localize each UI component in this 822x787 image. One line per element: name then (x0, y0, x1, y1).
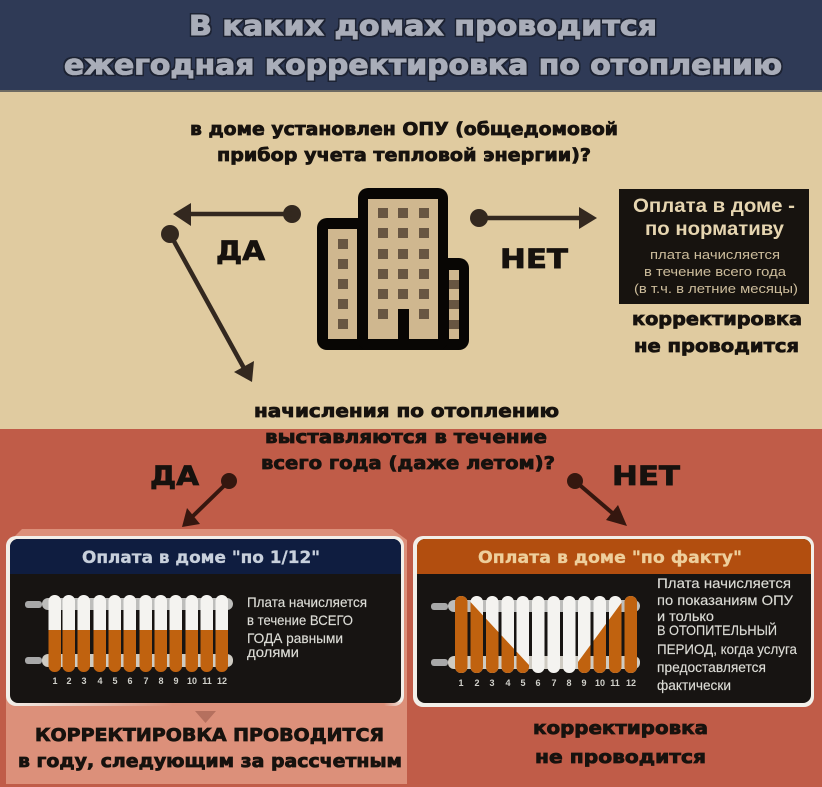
question: ОПУ: прибор учета тепловой энергии)? (217, 145, 591, 166)
beige background band (0, 91, 822, 431)
panel text: Плата начисляется (247, 594, 367, 610)
panel: норматив (619, 189, 809, 304)
note: корректировка не проводится (норматив): не проводится (634, 336, 799, 357)
panel text: В ОТОПИТЕЛЬНЫЙ (657, 621, 777, 638)
radiator: equal payments (25, 590, 235, 686)
month numbers: 8 (158, 676, 164, 686)
callout: корректировка проводится (6, 529, 407, 784)
month numbers: 10 (595, 678, 605, 688)
panel text: (в т.ч. в летние месяцы) (634, 281, 798, 296)
panel text: в течение ВСЕГО (247, 612, 353, 628)
question: начисления: выставляются в течение (265, 427, 547, 448)
month numbers: 1 (458, 678, 464, 688)
month numbers: 11 (202, 676, 212, 686)
panel header (417, 539, 811, 574)
panel: по 1/12 (6, 536, 404, 707)
month numbers: 2 (474, 678, 480, 688)
arrow: top right (470, 207, 597, 229)
month numbers: 5 (520, 678, 526, 688)
month numbers: 12 (217, 676, 227, 686)
callout: корректировка проводится: в году, следующим за рассчетным (18, 751, 402, 772)
callout: корректировка проводится: КОРРЕКТИРОВКА ПРОВОДИТСЯ (35, 725, 384, 746)
month numbers: 4 (97, 676, 103, 686)
red background band (0, 429, 822, 787)
arrow: down to second question (161, 225, 254, 382)
label: НЕТ: НЕТ (500, 244, 569, 275)
question: начисления (254, 401, 559, 474)
note: корректировка не проводится (по факту) (533, 718, 708, 768)
month numbers: 6 (535, 678, 541, 688)
label: НЕТ lower: НЕТ (612, 461, 681, 492)
icon: apartment buildings (317, 188, 469, 350)
panel text (657, 575, 797, 693)
arrow: lower right (567, 473, 627, 526)
panel text: долями (247, 644, 299, 660)
panel text: и только (657, 608, 714, 624)
panel text: ГОДА равными (247, 630, 343, 646)
month numbers: 6 (127, 676, 133, 686)
month numbers: 1 (52, 676, 58, 686)
note: корректировка не проводится (по факту): корректировка (533, 718, 708, 739)
question: начисления: всего года (даже летом)? (261, 453, 555, 474)
question: ОПУ (190, 119, 618, 166)
panel header (10, 539, 401, 574)
title: В каких домах проводится (189, 9, 657, 42)
month numbers: 5 (112, 676, 118, 686)
month numbers (52, 676, 227, 686)
header (0, 0, 822, 92)
panel heading: Оплата в доме "по 1/12" (82, 548, 320, 568)
panel text (634, 247, 798, 296)
note: корректировка не проводится (по факту): не проводится (535, 747, 706, 768)
month numbers: 8 (566, 678, 572, 688)
panel heading (633, 196, 795, 240)
panel text: ПЕРИОД, когда услуга (657, 641, 797, 657)
panel text: фактически (657, 677, 731, 693)
month numbers: 4 (505, 678, 511, 688)
month numbers (458, 678, 636, 688)
question: начисления: начисления по отоплению (254, 401, 559, 422)
month numbers: 10 (187, 676, 197, 686)
month numbers: 9 (581, 678, 587, 688)
month numbers: 12 (626, 678, 636, 688)
radiator: actual payments (431, 590, 642, 688)
panel text: предоставляется (657, 659, 766, 675)
title (64, 9, 782, 81)
arrow: top left (173, 203, 301, 226)
panel text: по показаниям ОПУ (657, 592, 793, 608)
panel heading: Оплата в доме - (633, 196, 795, 217)
panel text: Плата начисляется (657, 575, 791, 591)
panel heading: по нормативу (645, 219, 784, 240)
panel text: в течение всего года (644, 264, 787, 279)
pointer triangle (195, 711, 216, 723)
panel text: плата начисляется (650, 247, 780, 262)
panel: по факту (413, 536, 814, 707)
panel text (247, 594, 367, 660)
month numbers: 2 (66, 676, 72, 686)
month numbers: 9 (173, 676, 179, 686)
month numbers: 7 (143, 676, 149, 686)
arrow: lower left (182, 473, 237, 527)
panel heading: Оплата в доме "по факту" (478, 548, 742, 568)
label: ДА: ДА (216, 236, 265, 267)
month numbers: 3 (489, 678, 495, 688)
note: корректировка не проводится (норматив) (632, 309, 802, 357)
month numbers: 7 (551, 678, 557, 688)
note: корректировка не проводится (норматив): корректировка (632, 309, 802, 330)
month numbers: 11 (610, 678, 620, 688)
month numbers: 3 (81, 676, 87, 686)
label: ДА lower: ДА (150, 461, 199, 492)
title: ежегодная корректировка по отоплению (64, 48, 782, 81)
question: ОПУ: в доме установлен ОПУ (общедомовой (190, 119, 618, 140)
